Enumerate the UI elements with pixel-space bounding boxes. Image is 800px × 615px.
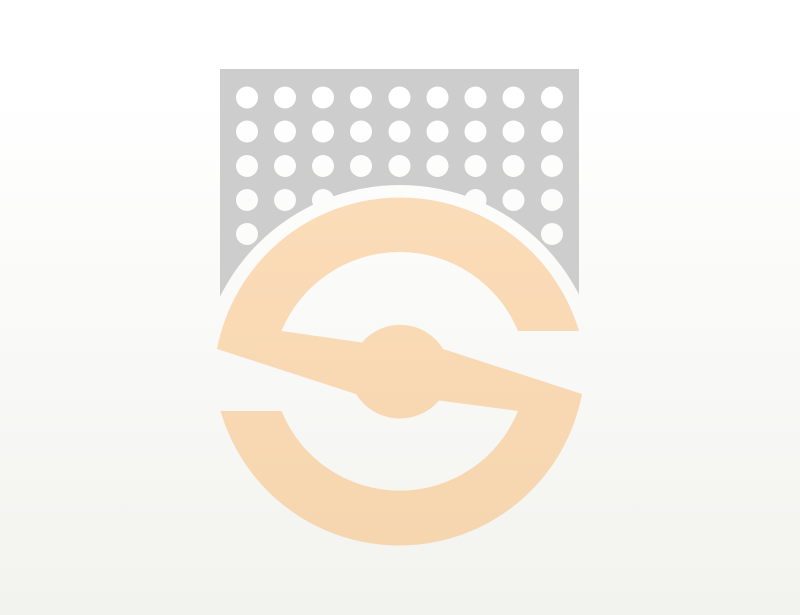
icon: orange S emblem with central hub (217, 197, 582, 545)
panel: grey perforated rectangle with dot grid (220, 69, 579, 309)
